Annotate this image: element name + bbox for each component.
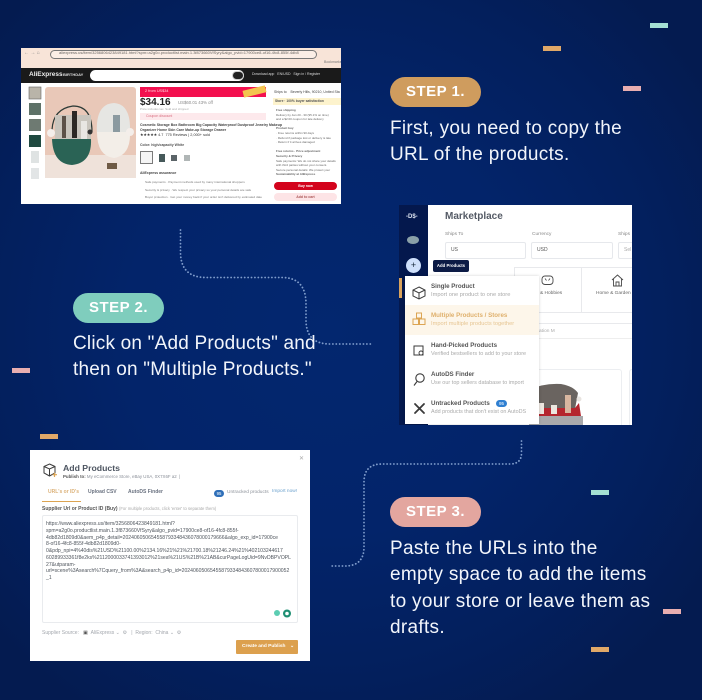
decorative dash: pink left	[12, 368, 30, 373]
tax note: Price includes tax. Sold and shipped	[140, 107, 188, 111]
description: Import one product to one store	[431, 292, 510, 298]
active tab underline	[42, 501, 81, 502]
assurance list: Security & privacy · We respect your privacy so your personal details are safe	[145, 188, 251, 192]
count badge	[496, 400, 507, 407]
product title: Organizer Home Skin Care Make-up Storage Drawer	[140, 128, 226, 132]
shipping details: · Return if it arrives damaged	[276, 140, 315, 144]
active marker	[399, 278, 402, 298]
search field	[90, 70, 244, 81]
search field	[529, 323, 639, 339]
icon: broken link	[414, 403, 425, 414]
step 2 text	[73, 333, 316, 380]
category card: hobbies	[514, 267, 582, 313]
untracked badge: 95	[217, 491, 221, 496]
search button	[232, 71, 244, 80]
coupon strip: Coupon discount	[146, 114, 172, 118]
publish line: Publish to: My eCommerce Store, eBay USA, 0X7X6F a2 |	[63, 474, 180, 479]
step 2 badge: STEP 2.	[89, 299, 148, 316]
currency field	[531, 242, 613, 259]
shipping details: Free shipping	[276, 108, 296, 112]
step 1 text: URL of the products.	[390, 144, 570, 165]
plus button: +	[411, 260, 416, 270]
label: Single Product	[431, 283, 475, 290]
label: Multiple Products / Stores	[431, 312, 507, 319]
category card: home	[582, 267, 642, 313]
url text: spm=a2g0o.productlist.main.1.3f873660VfSyry&algo_pvid=17900ce8-of16-4fc8-855f-	[46, 528, 239, 534]
product title: Cosmetic Storage Box Bathroom Big Capacity Waterproof Dustproof Jewelry Makeup	[140, 123, 282, 127]
untracked badge	[214, 490, 224, 497]
shipping details: Delivery by Jan 20 - 30 (95.1% on time)	[276, 113, 329, 117]
decorative dash: teal top right	[650, 23, 668, 28]
menu item: single product	[412, 283, 510, 300]
add products tooltip	[433, 260, 469, 272]
decorative dash: pink upper right	[623, 86, 641, 91]
icon: catalog	[414, 346, 424, 356]
step 3 badge	[390, 497, 481, 527]
create and publish button	[236, 640, 298, 654]
icon: stacked boxes	[412, 312, 426, 325]
rating: ★★★★★ 4.7 775 Reviews | 2,000+ sold	[140, 133, 210, 137]
menu item: untracked	[414, 400, 526, 415]
marketplace heading: Marketplace	[445, 211, 503, 222]
shipping details: Product buy	[276, 126, 294, 130]
step 1 badge: STEP 1.	[406, 83, 465, 100]
step 2 text: then on "Multiple Products."	[73, 359, 312, 380]
icon: magnifier	[414, 373, 425, 386]
next product card	[629, 369, 649, 429]
menu item: multiple products	[405, 305, 539, 335]
step 3 text	[390, 538, 650, 638]
step 3 text: Paste the URLs into the	[390, 538, 598, 559]
description: Add products that don't exist on AutoDS	[431, 409, 526, 415]
supplier row: Supplier Source: ▣ AliExpress ⌄ ⚙ | Region: China ⌄ ⚙	[42, 630, 181, 636]
shipping details: Security & Privacy	[276, 154, 302, 158]
label: & Hobbies	[540, 291, 562, 296]
step 3 text: to your store or leave them as	[390, 591, 650, 612]
logo: AliExpress	[29, 71, 63, 78]
ships from field: Sel	[624, 247, 631, 253]
price: $34.16	[140, 97, 171, 108]
store strip	[273, 98, 341, 105]
browser nav icons: ← → ⌂	[24, 50, 40, 56]
product photo	[45, 87, 136, 178]
old price: US$60.01 43% off	[178, 100, 213, 105]
ships to field: US	[451, 247, 458, 253]
tab: upload csv: Upload CSV	[88, 489, 117, 495]
menu item: hand-picked	[414, 342, 526, 357]
step 1 text: First, you need to copy the	[390, 118, 622, 139]
browser bar	[21, 48, 341, 68]
buy box heading: Ships to Beverly Hills, 90210, United Sta	[274, 90, 340, 94]
url textarea	[42, 515, 298, 623]
url text	[46, 521, 291, 581]
url text: _1	[46, 575, 52, 581]
campaign logo: BIRTHDAY	[63, 72, 83, 77]
count badge: 95	[499, 401, 504, 406]
shipping details: Safe payments: We do not share your details	[276, 159, 336, 163]
assurance list: Safe payments · Payment methods used by many international shoppers	[145, 180, 245, 184]
url text: 0&pdp_npi=4%40dis%21USD%21100.00%2134.16%21%21%21700.18%21246.24%21%402103244617	[46, 548, 283, 554]
field badges	[274, 610, 291, 618]
icon: box	[412, 286, 426, 300]
dialog title: Add Products	[63, 463, 120, 473]
shipping details: Free returns · Price adjustment	[276, 149, 320, 153]
description: Verified bestsellers to add to your store	[431, 351, 526, 357]
label: Hand-Picked Products	[431, 342, 497, 349]
tab: autods finder: AutoDS Finder	[128, 489, 163, 495]
dotted arrow: step 2 to step 3	[331, 440, 522, 567]
step 1 badge	[390, 77, 481, 107]
add to cart button: Add to cart	[296, 195, 315, 199]
shipping details: with third parties without your consent.	[276, 163, 327, 167]
icon: package with plus	[44, 464, 57, 477]
shipping details: · Refund if package lost or delivery is late	[276, 136, 331, 140]
logo: -D$-	[406, 214, 418, 220]
store icon	[407, 236, 419, 244]
currency label: Currency	[532, 232, 551, 237]
colour label: Color: high/capacity White	[140, 143, 184, 147]
import link: Import now!	[272, 489, 297, 494]
buy box	[273, 90, 341, 201]
url text: 8-of16-4fc8-855f-4db82d1809d0-	[46, 541, 121, 547]
dotted arrow: step 1 to step 2	[180, 229, 372, 345]
promo banner	[140, 87, 266, 97]
step 3 text: drafts.	[390, 617, 445, 638]
product image: cooler bag	[529, 384, 583, 425]
header links: Download app EN/USD Sign in / Register	[252, 72, 320, 76]
description: Import multiple products together	[431, 321, 514, 327]
shipping details: and a $2.00 coupon for late delivery	[276, 117, 324, 121]
ships from label: Ships	[618, 232, 630, 237]
menu item: autods finder	[414, 371, 524, 386]
ships to field	[445, 242, 526, 259]
promo banner: 2 from US$34	[145, 89, 168, 93]
step 3 badge: STEP 3.	[406, 503, 465, 520]
shipping details: Secure personal details: We protect your	[276, 168, 330, 172]
label: Untracked Products	[431, 400, 490, 407]
icon: gamepad	[542, 276, 554, 285]
description: Use our top sellers database to import	[431, 380, 524, 386]
tab: urls: URL's or ID's	[48, 489, 79, 495]
search field: ation M	[539, 329, 555, 334]
screenshot: Add Products dialog	[30, 450, 310, 661]
decorative dash: orange bottom right	[591, 647, 609, 652]
label: AutoDS Finder	[431, 371, 474, 378]
create and publish button: ⌄	[290, 644, 294, 649]
add products tooltip: Add Products	[437, 263, 465, 268]
url text: url=scene%3Asearch%7Cquery_from%3A&search_p4p_id=20240605065455879334843607800017900052	[46, 568, 289, 574]
decorative dash: pink lower right	[663, 609, 681, 614]
close icon: ✕	[299, 456, 304, 462]
shipping details	[276, 108, 336, 176]
assurance list	[145, 180, 262, 199]
screenshot: AliExpress product page	[21, 48, 341, 204]
shipping details: · Free returns within 90 days	[276, 131, 314, 135]
plus button	[406, 258, 421, 273]
buy now button	[274, 182, 337, 190]
untracked label: Untracked products	[227, 490, 269, 495]
product card	[529, 369, 622, 429]
create and publish button: Create and Publish	[242, 644, 285, 649]
url text: 27&utparam-	[46, 562, 75, 568]
store strip: Store · 100% buyer satisfaction	[275, 99, 324, 103]
decorative dash: teal lower right	[591, 490, 609, 495]
assurance heading: AliExpress assurance	[140, 171, 176, 175]
address field	[50, 50, 317, 59]
step 3 text: empty space to add the items	[390, 564, 647, 585]
bookmarks text: Bookmarks	[324, 60, 341, 64]
coupon strip	[140, 113, 266, 120]
add products dropdown	[405, 276, 539, 424]
sidebar	[399, 205, 428, 425]
ships from field	[618, 242, 650, 259]
icon: house	[612, 274, 624, 286]
url text: 60289933361f8e2ks%2112000033741393012%21sea%21US%21B%21AB&curPageLogUid=9NvDBPVOPL	[46, 555, 291, 561]
url text: 4db82d1809d0&aem_p4p_detail=202406050654558793348436078000179666&algo_exp_id=17900ce	[46, 534, 278, 540]
shipping details: Sustainability at AliExpress	[276, 172, 315, 176]
buy now button: Buy now	[298, 184, 313, 188]
currency field: USD	[537, 247, 548, 253]
step 2 badge	[73, 293, 164, 323]
promo sticker	[242, 85, 267, 98]
AliExpress header	[21, 68, 341, 83]
colour swatches	[140, 151, 190, 164]
add to cart button	[274, 193, 337, 201]
screenshot: AutoDS marketplace with Add Products menu	[399, 205, 632, 425]
decorative dash: orange left	[40, 434, 58, 439]
step 1 text	[390, 118, 622, 165]
label: Home & Garden	[596, 291, 631, 296]
product title	[140, 123, 282, 132]
url text: https://www.aliexpress.us/item/3256806423849181.html?	[46, 521, 175, 527]
assurance list: Buyer protection · Get your money back if your order isn't delivered by estimated date	[145, 195, 262, 199]
step 2 text: Click on "Add Products" and	[73, 333, 316, 354]
decorative dash: orange top	[543, 46, 561, 51]
field label: Supplier Url or Product ID (Buy) (For multiple products, click 'enter' to separate them)	[42, 506, 216, 512]
ships to label: Ships To	[445, 232, 463, 237]
thumbnails	[28, 86, 42, 179]
